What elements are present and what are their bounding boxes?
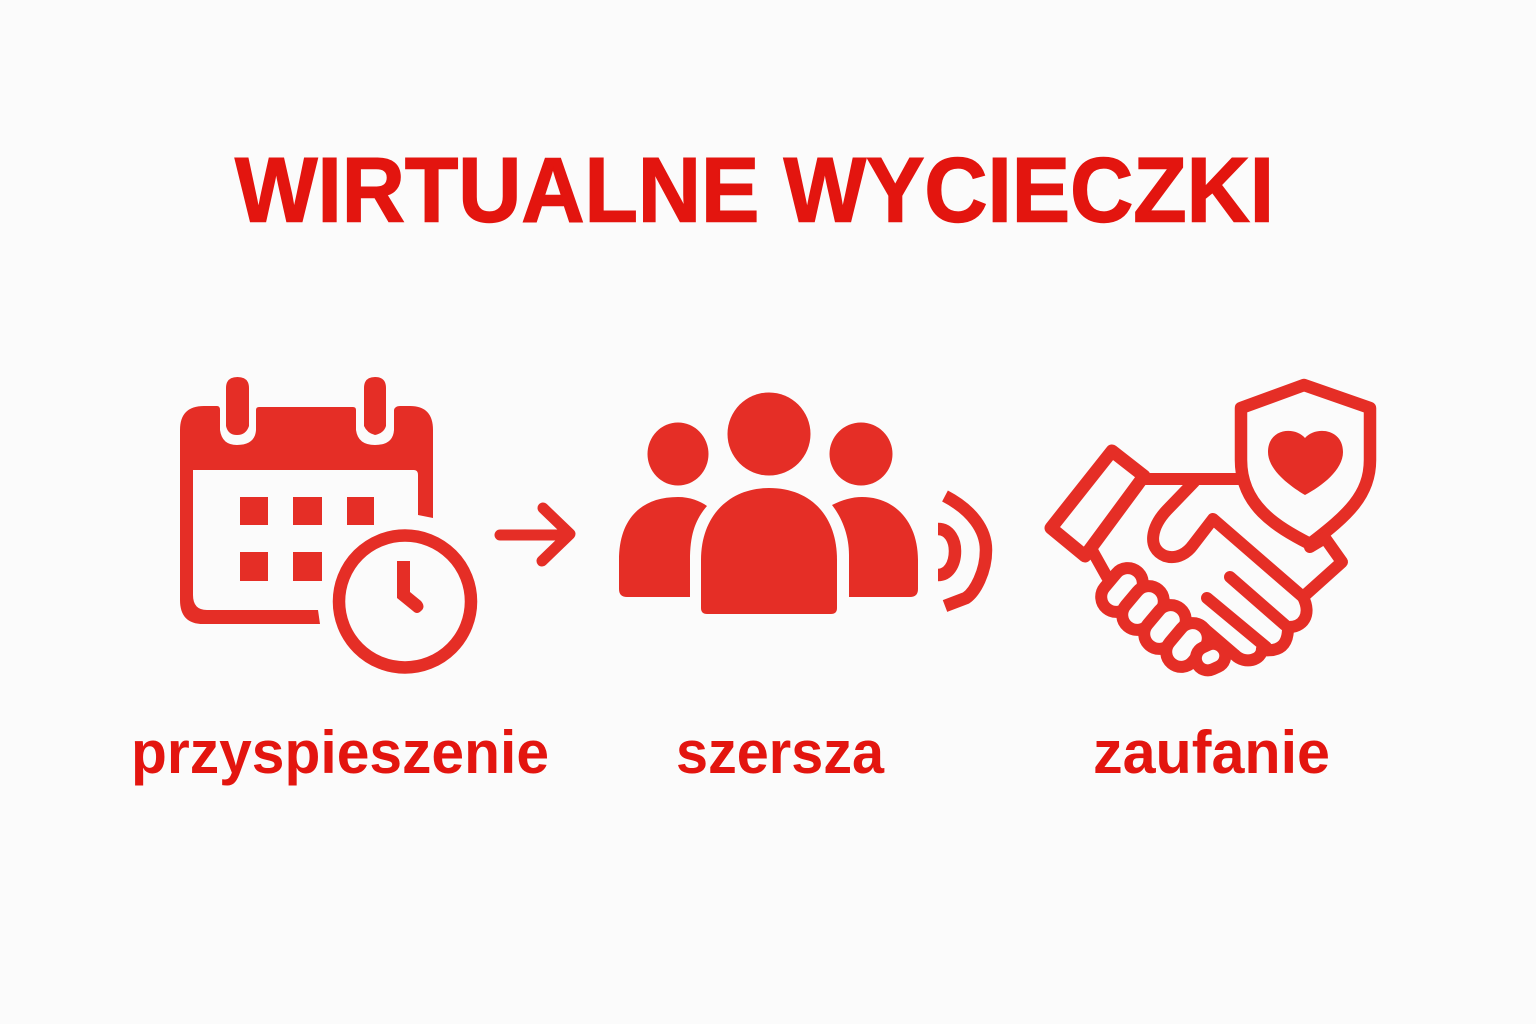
calendar day squares [240,497,374,581]
shield [1241,385,1370,544]
cuff [1051,451,1144,556]
icon: group of people with signal waves [619,392,986,614]
label: przyspieszenie: przyspieszenie [131,719,549,786]
label: zaufanie: zaufanie [1093,719,1330,786]
right side of hand [1303,538,1342,597]
calendar rings [226,377,386,435]
heart [1268,431,1343,495]
top arm line [1146,473,1240,485]
calendar body [180,406,433,624]
clock [339,536,471,668]
lower wrist [1093,552,1107,577]
arrow [500,508,570,561]
title: WIRTUALNE WYCIECZKI [235,140,1274,242]
icon: calendar with clock [180,377,471,668]
left person [619,422,708,597]
thumb and right hand [1153,482,1307,627]
interlocked fingers [1200,577,1288,660]
left fingers [1095,562,1229,674]
right person [830,422,918,597]
icon: handshake with heart shield [1051,385,1370,674]
label: szersza: szersza [676,719,885,786]
center person [701,392,837,614]
signal waves [938,496,986,606]
